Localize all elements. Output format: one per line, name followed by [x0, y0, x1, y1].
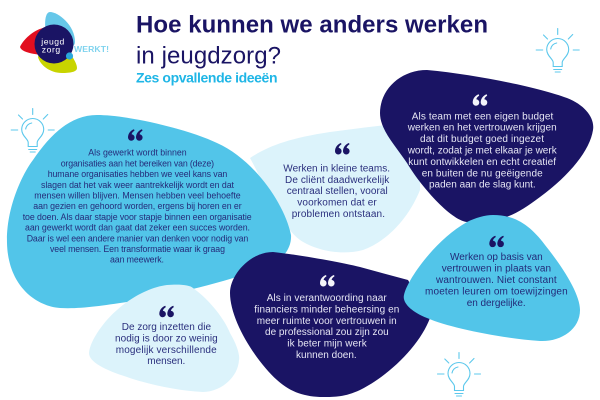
logo wordmark: zorg [42, 44, 60, 54]
icon: quote mark [489, 236, 504, 247]
blob: pale centre [250, 122, 420, 252]
quote text: De zorg inzetten die [122, 322, 211, 333]
subtitle: Zes opvallende ideeën [136, 70, 278, 86]
logo petal: blue [45, 12, 75, 48]
quote text: organisaties aan het bereiken van (deze) [61, 158, 214, 168]
icon: light bulb bottom [438, 352, 480, 396]
quote text: kunt ontwikkelen en echt creatief [408, 157, 556, 168]
icon: light bulb top right [536, 28, 579, 72]
quote text [425, 252, 568, 309]
quote text: meer ruimte voor vertrouwen in [257, 316, 397, 327]
quote text: financiers minder beheersing en [254, 304, 399, 315]
logo tagline: WERKT! [74, 44, 109, 54]
quote text [407, 111, 558, 191]
quote text: toe doen. Als daar stapje voor stapje binnen een organisatie [23, 212, 252, 222]
quote text: nodig is door zo weinig [115, 333, 218, 344]
blob: dark top [380, 70, 593, 222]
panel: kleine teams quote [250, 122, 420, 252]
quote text: mogelijk verschillende [116, 345, 217, 356]
quote text: ik beter mijn werk [287, 339, 368, 350]
blob: large blue [7, 115, 291, 308]
icon: quote mark [473, 94, 487, 106]
icon: light bulb left [11, 108, 54, 152]
icon: quote mark [128, 129, 143, 141]
quote text [115, 322, 218, 367]
logo: jeugdzorg werkt [20, 12, 109, 73]
quote text: Werken op basis van [450, 252, 543, 263]
panel: eigen budget quote [380, 70, 593, 222]
title: Hoe kunnen we anders werken [136, 12, 488, 39]
panel: verantwoording quote [230, 252, 430, 397]
quote text: Als team met een eigen budget [412, 111, 554, 122]
quote text: aan meewerk. [110, 255, 164, 265]
quote text: moeten leuren om toewijzingen [425, 286, 568, 297]
icon: quote mark [159, 306, 174, 317]
quote text: dat dit budget goed ingezet [420, 134, 544, 145]
panel: vertrouwen quote [404, 215, 580, 341]
logo petal: red [20, 27, 52, 56]
quote text: de professional zou zijn zou [265, 327, 389, 338]
quote text: Werken in kleine teams. [283, 163, 390, 174]
title: in jeugdzorg? [136, 42, 281, 69]
quote text: werken en het vertrouwen krijgen [407, 123, 557, 134]
quote text: De cliënt daadwerkelijk [285, 175, 390, 186]
quote text: Daar is wel een andere manier van denken voor nodig van [27, 233, 248, 243]
quote text [283, 163, 390, 220]
icon: quote mark [335, 143, 350, 154]
quote text: problemen ontstaan. [292, 209, 385, 220]
logo wordmark [40, 36, 65, 54]
quote text: Als in verantwoording naar [267, 293, 387, 304]
quote text [254, 293, 399, 361]
blob: pale bottom left [89, 285, 239, 392]
quote text: slagen dat het vak weer aantrekkelijk wordt en dat [41, 180, 235, 190]
quote text: paden aan de slag kunt. [429, 180, 536, 191]
quote text: mensen. [147, 356, 185, 367]
quote text: humane organisaties hebben we veel kans van [48, 169, 227, 179]
quote text: wordt, zodat je met elkaar je werk [407, 146, 558, 156]
logo circle [34, 24, 74, 64]
quote text: vertrouwen in plaats van [442, 263, 551, 274]
logo wordmark: jeugd [40, 36, 65, 46]
quote text: kunnen doen. [296, 350, 357, 361]
quote text: wantrouwen. Niet constant [435, 275, 557, 286]
quote text: mensen willen blijven. Mensen hebben veel behoefte [34, 190, 241, 200]
quote text: aan gezien en gehoord worden, ergens bij horen en er [33, 201, 242, 211]
logo petal: green [38, 50, 77, 73]
quote text: en dergelijke. [467, 298, 526, 309]
quote text: centraal stellen, vooral [287, 186, 388, 197]
panel: zorg inzetten quote [89, 285, 239, 392]
logo small badge [66, 52, 73, 60]
quote text: Als gewerkt wordt binnen [88, 148, 187, 158]
title [136, 12, 488, 69]
quote text: voorkomen dat er [297, 198, 377, 209]
quote text: aan gewerkt wordt dan gaat dat zeker een succes worden. [25, 223, 250, 233]
quote text: veel mensen. Een transformatie waar ik graag [50, 244, 225, 254]
blob: blue right [404, 215, 580, 341]
quote text: en buiten de nu geëigende [422, 168, 543, 179]
icon: quote mark [320, 275, 335, 286]
quote text [23, 148, 252, 265]
panel: transformatie quote [7, 115, 291, 308]
blob: dark bottom [230, 252, 430, 397]
